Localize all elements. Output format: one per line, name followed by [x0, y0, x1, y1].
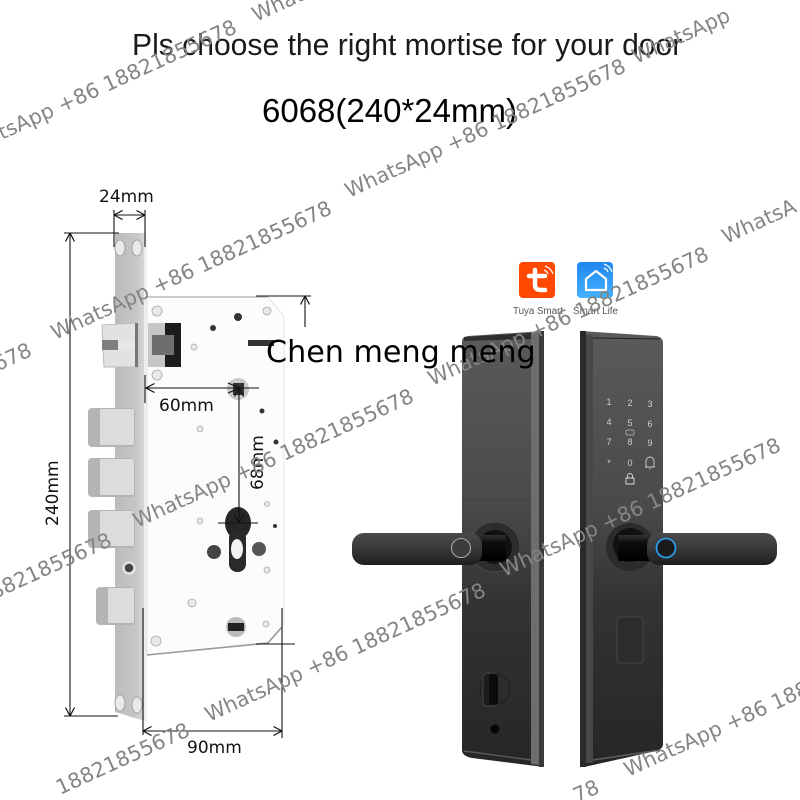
watermarks: WhatsApp +86 18821855678	[47, 196, 335, 345]
front neck	[618, 535, 650, 561]
watermarks: WhatsApp +86 18821855678	[496, 433, 784, 582]
title: Pls choose the right mortise for your door	[132, 29, 682, 62]
lower key slot	[226, 617, 246, 637]
front plate	[580, 331, 663, 767]
icon: Tuya Smart app	[519, 262, 555, 298]
back neck	[478, 535, 506, 561]
keypad: 8	[627, 437, 633, 447]
faceplate	[115, 233, 146, 721]
dead bolts	[88, 408, 135, 625]
latch mechanism window	[148, 323, 181, 367]
keypad: 6	[647, 419, 653, 429]
dimension label 240mm: 240mm	[43, 460, 63, 526]
dimension: 68mm	[218, 388, 258, 523]
icon: Smart Life app	[577, 262, 613, 298]
dimension: 24mm	[114, 210, 145, 247]
keypad card icon	[626, 430, 634, 435]
keypad: 2	[627, 398, 633, 408]
app label: Smart Life: Smart Life	[573, 306, 618, 317]
watermarks: WhatsApp +86 18821855678	[341, 54, 629, 203]
front handle	[647, 533, 777, 565]
watermarks: WhatsApp	[628, 3, 734, 69]
back handle	[352, 533, 482, 565]
dimension: 90mm	[143, 608, 295, 738]
dimension lines	[64, 210, 311, 738]
app label: Tuya Smart: Tuya Smart	[513, 306, 563, 317]
keypad lock icon	[626, 474, 634, 484]
keypad bell icon	[645, 457, 655, 470]
dimension: top offset	[256, 296, 311, 327]
keypad: 7	[606, 437, 612, 447]
watermarks: WhatsApp +86 18821855678	[129, 384, 417, 533]
watermarks: 18821855678	[52, 718, 193, 800]
front rose	[606, 523, 654, 571]
keypad	[606, 397, 653, 468]
keypad: 0	[627, 458, 633, 468]
keypad: 3	[647, 399, 653, 409]
cylinder cut-out	[207, 507, 266, 572]
keypad: 9	[647, 438, 653, 448]
rivets and holes	[151, 306, 271, 646]
dimension: 60mm	[145, 375, 259, 403]
watermarks: WhatsApp +86 18821855678	[424, 242, 712, 391]
card reader outline	[617, 617, 643, 663]
dimension label 68mm: 68mm	[248, 435, 268, 490]
latch bolt	[102, 323, 138, 367]
dark holes	[210, 313, 278, 528]
front panel of door lock	[580, 331, 777, 767]
dimension: 240mm	[64, 233, 119, 716]
dimension label 60mm: 60mm	[159, 396, 214, 416]
keypad: 4	[606, 417, 612, 427]
dimension label 24mm: 24mm	[99, 187, 154, 207]
watermarks: WhatsA	[718, 194, 800, 249]
back panel of door lock	[352, 331, 544, 767]
keypad: 1	[606, 397, 612, 407]
back plate	[462, 331, 544, 767]
mortise lock body illustration	[88, 233, 284, 721]
case plate	[147, 297, 284, 655]
model heading: 6068(240*24mm)	[262, 92, 517, 129]
overlay name text: Chen meng meng	[266, 335, 536, 370]
back rose	[470, 522, 520, 572]
thumb turn	[480, 673, 510, 706]
watermarks: WhatsApp +86 18821855678	[201, 578, 489, 727]
emergency key hole	[490, 724, 500, 734]
keypad: 5	[627, 418, 633, 428]
keypad: *	[607, 458, 611, 468]
spindle hole	[227, 378, 249, 400]
dimension label 90mm: 90mm	[187, 738, 242, 758]
